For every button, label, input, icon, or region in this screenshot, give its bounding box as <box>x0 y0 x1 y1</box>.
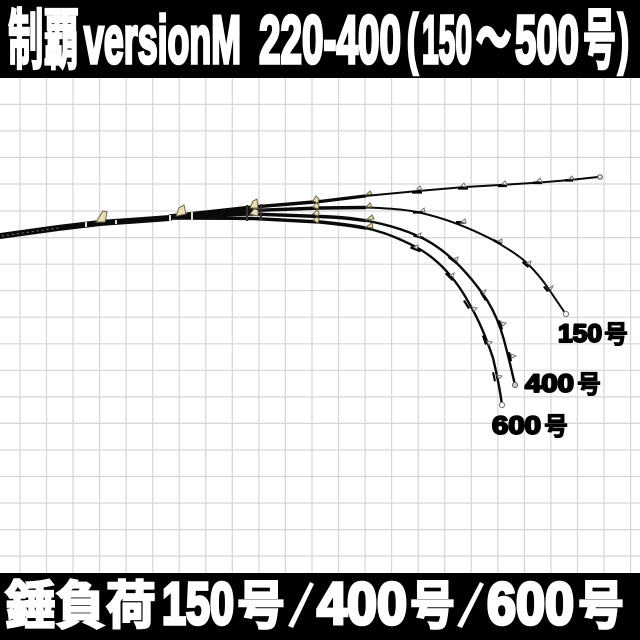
label: 150号 <box>558 320 628 349</box>
footer text: sinker loads <box>5 571 624 637</box>
header banner <box>0 0 640 78</box>
label: 400号: 400 <box>525 370 574 398</box>
label: 400号: 号 <box>577 371 601 399</box>
title: product name: 150 <box>422 2 472 78</box>
label: 150号: 150 <box>558 320 602 348</box>
label: 600号 <box>492 412 568 441</box>
footer text: sinker loads: 錘負荷 <box>5 578 156 636</box>
label: 600号: 号 <box>544 413 568 441</box>
rod curve: unloaded <box>365 177 598 196</box>
footer text: sinker loads: 400 <box>317 571 407 637</box>
title: product name <box>8 1 629 78</box>
footer text: sinker loads: 号 <box>578 578 624 636</box>
rod butt section <box>0 218 170 236</box>
rod thick inner sections <box>170 196 365 228</box>
footer text: sinker loads: 150 <box>162 571 234 637</box>
label: 600号: 600 <box>492 412 541 440</box>
guides: rod windings <box>410 179 573 382</box>
title: product name: ) <box>618 1 629 75</box>
rod curve: 400号 <box>365 220 515 385</box>
rod tips <box>499 175 602 408</box>
title: product name: ( <box>407 1 418 75</box>
guides: small rings <box>414 176 574 379</box>
label: 150号: 号 <box>604 321 628 349</box>
title: product name: 制覇 <box>8 3 79 77</box>
title: product name: versionM <box>84 2 241 78</box>
title: product name: ～ <box>476 6 511 73</box>
label: 400号 <box>525 370 601 399</box>
footer text: sinker loads: 号 <box>410 578 455 636</box>
footer text: sinker loads: 600 <box>487 571 574 637</box>
guides: butt section <box>85 191 374 228</box>
rod curve: 600号 <box>365 228 502 405</box>
footer banner <box>0 571 640 640</box>
footer text: sinker loads: 号 <box>237 578 285 636</box>
title: product name: 220-400 <box>259 2 401 78</box>
title: product name: 500 <box>515 2 579 78</box>
fishing rod chart: four bend curves <box>0 175 602 408</box>
rod curve: 150号 <box>365 208 565 313</box>
